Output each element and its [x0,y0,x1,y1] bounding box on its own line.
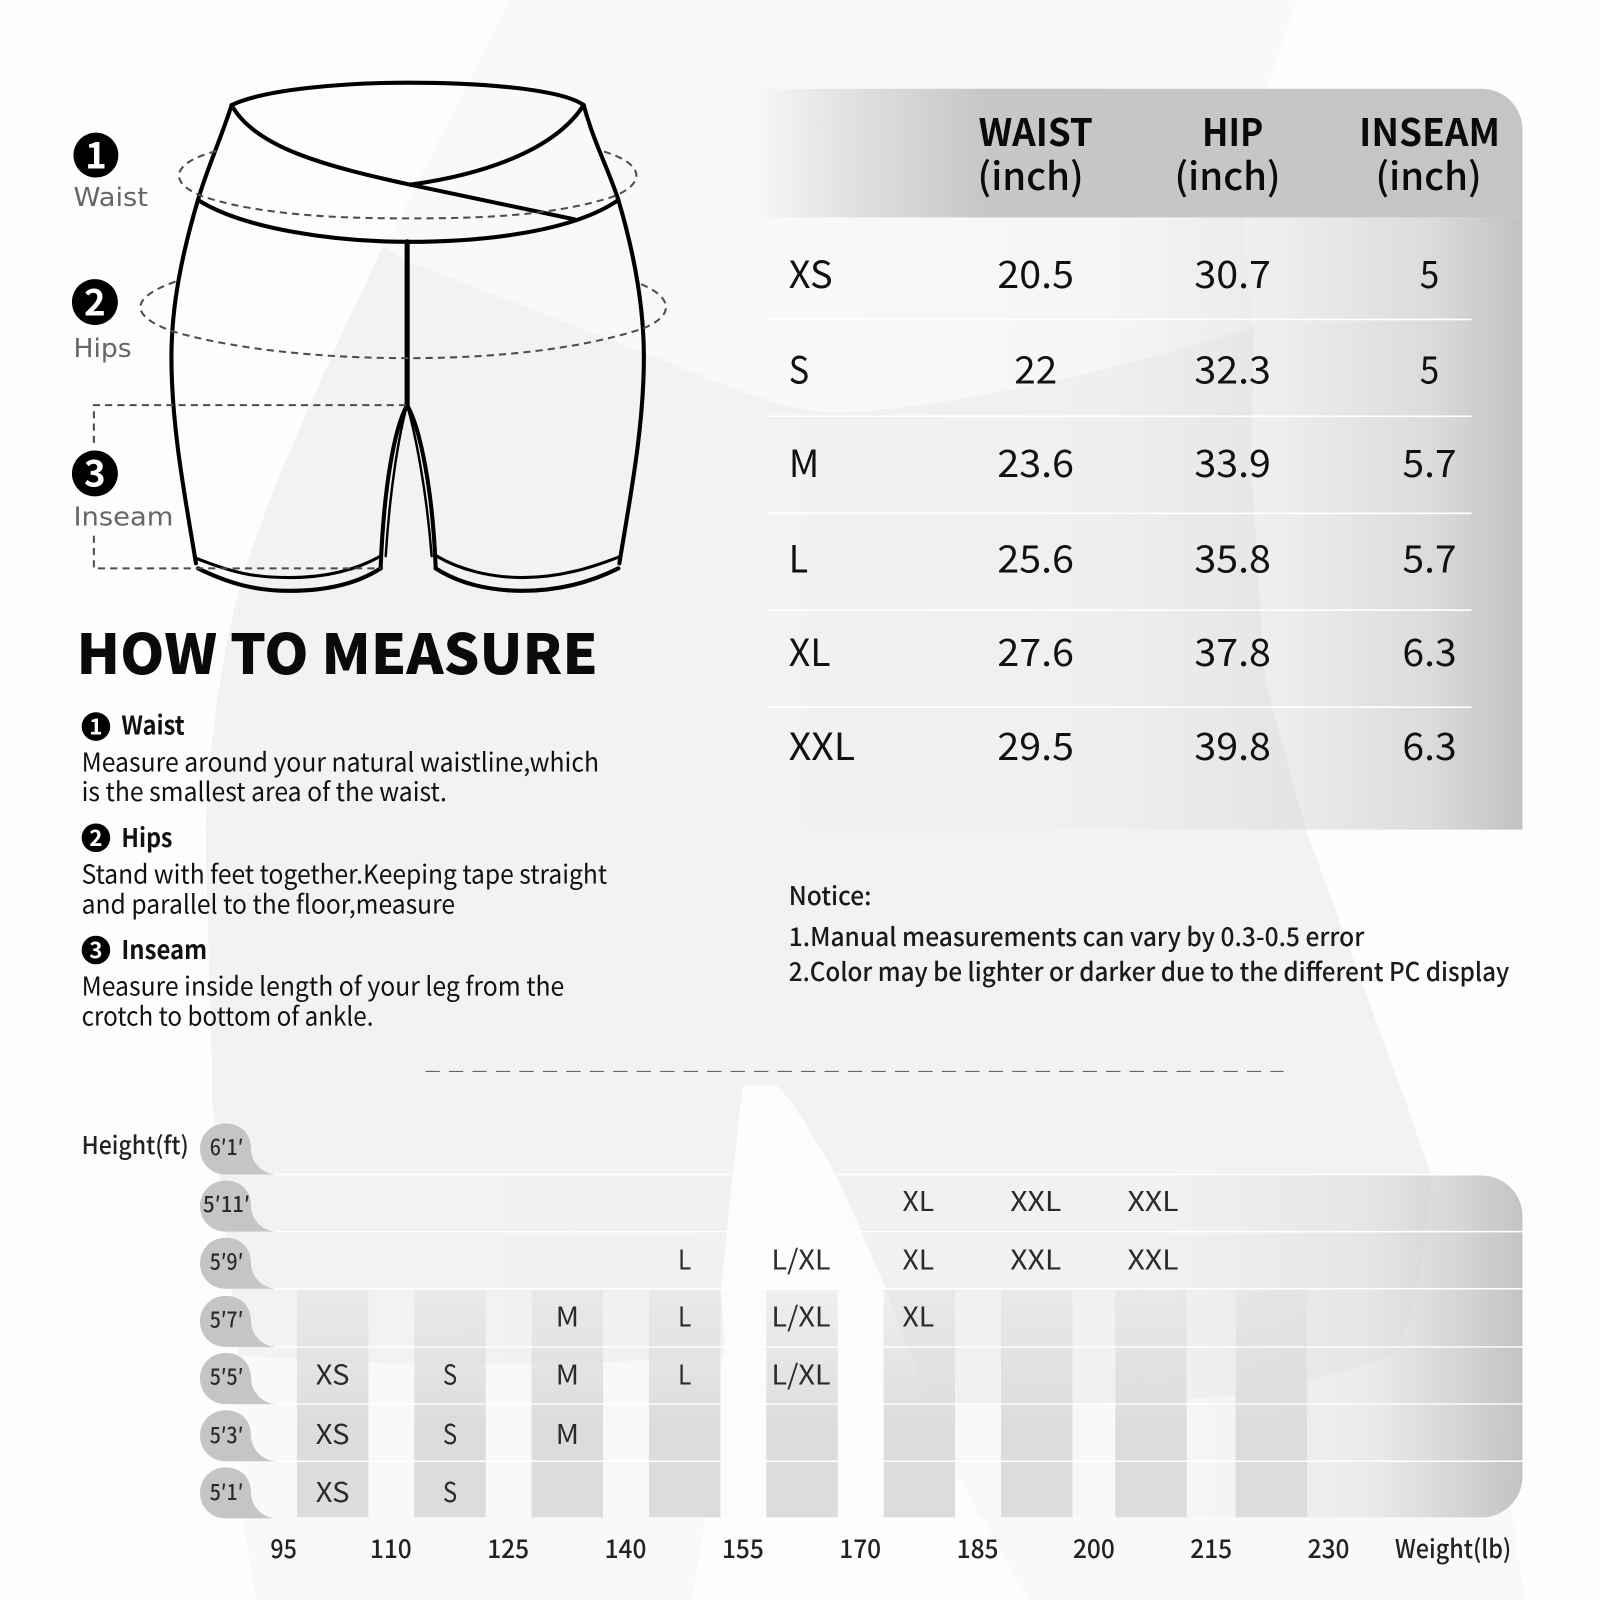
size row 5'3: M [556,1412,579,1452]
weight axis labels: 110 [370,1529,412,1566]
instruction: hips: and parallel to the floor,measure [82,884,455,921]
instruction: waist [82,706,599,809]
weight axis labels: Weight(lb) [1395,1529,1511,1566]
table column headings: (inch) [1174,146,1281,201]
size row 5'11: XXL [1010,1179,1061,1219]
section separator [426,1070,1284,1072]
size row 5'3: XS [316,1412,349,1452]
instruction: waist: Waist [121,706,185,743]
height labels: 5′9′ [210,1245,243,1276]
instruction: inseam: Measure inside length of your leg from the [82,966,564,1003]
size row 5'9: XXL [1010,1237,1061,1277]
table row S: 22 [1014,339,1057,394]
table row XS: XS [789,244,833,299]
weight axis labels: 185 [957,1529,998,1566]
marker: 2 Hips [72,272,132,364]
table row S [789,339,1439,394]
size row 5'7: L [678,1295,691,1335]
table row L: 35.8 [1194,528,1271,583]
height labels: 6′1′ [210,1131,243,1162]
weight axis labels: 155 [722,1529,764,1566]
table row XXL: 29.5 [997,716,1074,771]
table column headings: HIP [1202,102,1263,157]
table row S: S [789,339,809,394]
size row 5'9: L/XL [771,1237,831,1277]
table row M: 23.6 [997,433,1074,488]
height labels: 5′7′ [210,1304,243,1335]
weight axis labels: 140 [605,1529,646,1566]
notice text block: 2.Color may be lighter or darker due to the different PC display [789,952,1509,989]
panel: size table [750,89,1522,830]
instruction: inseam [82,930,564,1034]
weight axis labels: 95 [270,1529,297,1566]
table row XXL [789,716,1457,771]
table row M [789,433,1457,488]
notice text block [789,876,1509,989]
table row XS [789,244,1439,299]
weight axis labels: 200 [1073,1529,1115,1566]
table row M: 33.9 [1194,433,1271,488]
heading: how to measure: HOW TO MEASURE [77,610,598,690]
table row L: 5.7 [1403,528,1457,583]
notice text block: 1.Manual measurements can vary by 0.3-0.5 error [789,917,1365,954]
weight axis labels: 230 [1308,1529,1349,1566]
instruction: waist: 1 [89,710,103,742]
size row 5'1 [316,1470,457,1510]
table column headings: (inch) [1376,146,1482,201]
marker: 3 Inseam [72,444,173,533]
marker: 2 Hips: 2 [84,272,106,326]
size row 5'5 [316,1353,831,1393]
table row XL: XL [789,622,831,677]
size row 5'7: L/XL [771,1295,831,1335]
size row 5'11 [903,1179,1179,1219]
size row 5'9 [678,1237,1179,1277]
table row XL [789,622,1457,677]
notice text block: Notice: [789,876,871,913]
table row XS: 5 [1420,244,1439,299]
size row 5'3: S [443,1412,457,1452]
table row XL: 6.3 [1403,622,1457,677]
size row 5'1: XS [316,1470,349,1510]
table row S: 5 [1420,339,1439,394]
marker: 3 Inseam: 3 [84,444,106,498]
height labels: 5′11′ [203,1188,250,1219]
instruction: inseam: crotch to bottom of ankle. [82,997,373,1034]
instruction: inseam: 3 [89,933,103,965]
size row 5'11: XL [903,1179,934,1219]
instruction: hips: Hips [121,818,172,855]
size row 5'3 [316,1412,579,1452]
chart row dividers [273,1174,1522,1461]
table row XL: 27.6 [997,622,1074,677]
table row L: 25.6 [997,528,1074,583]
table row XXL: XXL [789,716,855,771]
size row 5'7: XL [903,1295,934,1335]
chart: height and weight size grid [82,1123,1522,1566]
instruction: waist: is the smallest area of the waist. [82,772,447,809]
instruction: hips [82,818,607,921]
instruction: hips: 2 [89,821,103,853]
table row XXL: 39.8 [1194,716,1271,771]
weight axis labels: 170 [839,1529,881,1566]
size row 5'5: M [556,1353,579,1393]
chart background panel [276,1176,1522,1517]
table row L [789,528,1457,583]
marker: 1 Waist: Waist [73,183,148,213]
table body shading [755,217,1522,830]
size row 5'5: L/XL [771,1353,831,1393]
size row 5'5: L [678,1353,691,1393]
size row 5'9: XL [903,1237,934,1277]
size row 5'9: L [678,1237,691,1277]
shorts illustration [171,83,644,591]
chart weight columns [297,1290,1307,1517]
size row 5'11: XXL [1128,1179,1179,1219]
instruction: waist: Measure around your natural waistline,which [82,742,599,779]
table header band [750,89,1522,217]
table row S: 32.3 [1194,339,1271,394]
instruction: inseam: Inseam [121,930,207,967]
size row 5'7 [556,1295,934,1335]
table row L: L [789,528,808,583]
marker: 1 Waist: 1 [85,125,107,179]
height labels: 5′3′ [210,1419,243,1450]
marker: 1 Waist [73,125,148,213]
table column headings [978,102,1500,201]
instruction: hips: Stand with feet together.Keeping tape straight [82,855,607,892]
table row XS: 20.5 [997,244,1074,299]
weight axis labels: 125 [487,1529,529,1566]
table row XXL: 6.3 [1403,716,1457,771]
height labels [203,1131,250,1507]
table row XL: 37.8 [1194,622,1271,677]
table row XS: 30.7 [1194,244,1271,299]
marker: 3 Inseam: Inseam [73,503,173,533]
table column headings: (inch) [978,146,1084,201]
table row dividers [767,319,1471,707]
size row 5'5: XS [316,1353,349,1393]
weight axis labels: 215 [1190,1529,1232,1566]
marker: 2 Hips: Hips [73,334,132,364]
height labels: 5′1′ [210,1476,243,1507]
size row 5'7: M [556,1295,579,1335]
weight axis labels [270,1529,1511,1566]
height tabs [200,1123,276,1518]
size row 5'1: S [443,1470,457,1510]
table row M: 5.7 [1403,433,1457,488]
height labels: 5′5′ [210,1361,243,1392]
dashed measure guides [94,151,666,568]
size row 5'9: XXL [1128,1237,1179,1277]
table row M: M [789,433,819,488]
table column headings: WAIST [979,102,1093,157]
table column headings: INSEAM [1359,102,1500,157]
height axis title: Height(ft) [82,1127,189,1162]
size row 5'5: S [443,1353,457,1393]
